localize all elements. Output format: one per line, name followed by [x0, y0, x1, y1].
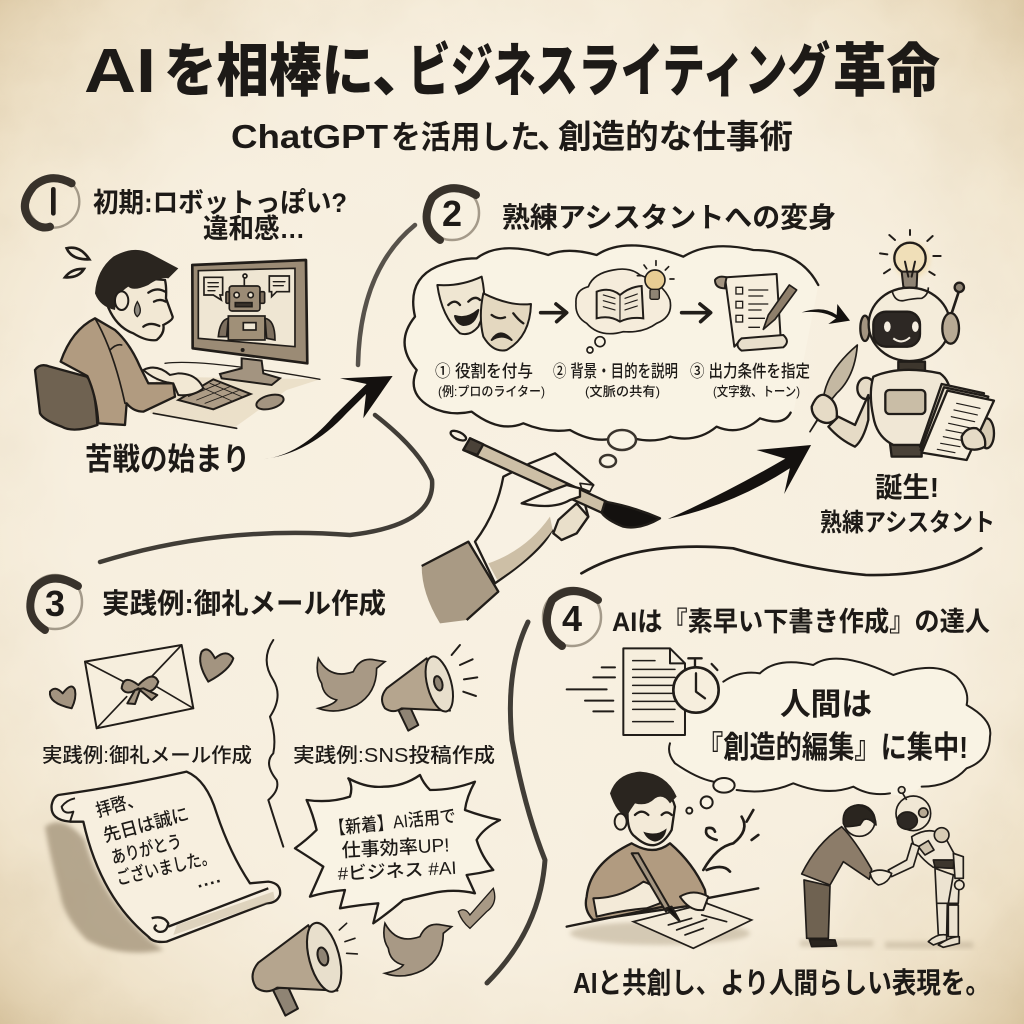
cloud tail bubbles: [600, 430, 636, 467]
title: 、: [372, 39, 430, 104]
illustrations: arrow, hand and wave: [422, 429, 981, 623]
burst bubble text: #ビジネス #AI: [337, 858, 457, 884]
icon: envelope with bow: [85, 645, 193, 728]
scroll letter text: 先日は誠に: [101, 804, 191, 846]
cloud text line 1: 人間は: [780, 687, 872, 722]
happy man: hands and brush: [593, 853, 708, 922]
arrow: to robot: [802, 304, 850, 324]
icon: megaphone: [382, 645, 477, 731]
icon: bird: [317, 658, 385, 711]
subtitle: を活用した: [391, 119, 540, 155]
step labels: (例:プロのライター): [438, 384, 545, 399]
numeral 3: 3: [45, 583, 65, 624]
hand with ink brush: [422, 429, 660, 623]
step badge 1: [25, 176, 79, 228]
title: を相棒に: [164, 39, 374, 104]
ground wash: [800, 940, 973, 948]
heading 1: 初期:ロボットっぽい?: [93, 188, 347, 218]
happy man: head: [627, 790, 675, 845]
robot partner: [888, 787, 964, 947]
numeral 4: 4: [562, 598, 582, 639]
panel 2: becoming a skilled assistant: [405, 186, 995, 623]
happy man: shirt: [586, 843, 707, 920]
step badge 4: [543, 588, 601, 646]
subtitle: 創造的な仕事術: [558, 118, 793, 155]
caption: birth: 誕生!: [875, 472, 939, 503]
step labels: ① 役割を付与: [435, 362, 533, 381]
divider: curve beside step 4: [487, 622, 545, 983]
title: 革命: [833, 39, 940, 104]
caption: thank-you mail: 実践例:御礼メール作成: [42, 744, 252, 767]
robot: papers: [920, 384, 984, 452]
robot: quill: [810, 345, 857, 432]
step badge 3: [28, 575, 82, 630]
icon: torn heart: [458, 888, 495, 928]
icon: sweat drops: [65, 248, 89, 277]
step labels: ③ 出力条件を指定: [690, 362, 810, 381]
burst bubble text: [328, 806, 457, 884]
thought cloud: [669, 659, 990, 796]
panel 3: practical examples: [28, 575, 500, 1016]
step labels: (文字数、トーン): [713, 384, 800, 399]
icon: bird bottom: [384, 923, 452, 976]
step labels: [435, 362, 810, 399]
scroll letter text: 拝啓、: [94, 789, 144, 821]
scroll letter: [52, 772, 280, 942]
wavy divider: [267, 640, 283, 847]
arrow: to step 2: [263, 376, 393, 459]
illustration: worried man at computer: [35, 248, 320, 430]
caption: skilled assistant: 熟練アシスタント: [820, 509, 995, 537]
panel 1: early struggle: [25, 176, 393, 477]
scroll letter text: ございました。: [114, 846, 217, 889]
icon: document: [623, 648, 685, 735]
arrow: brush stroke to robot: [668, 445, 811, 519]
burst bubble text: 【新着】AI活用で: [328, 806, 457, 839]
cloud text line 2: 『創造的編集』に集中!: [697, 730, 968, 765]
scroll letter text: ....: [194, 866, 222, 892]
desk wash: [570, 922, 750, 945]
panel 4: AI draft, human editing: [543, 588, 990, 1000]
monitor: [192, 260, 307, 363]
icon: megaphone bottom: [253, 919, 348, 1016]
caption: SNS post: 実践例:SNS投稿作成: [293, 744, 495, 767]
happy man: hair: [610, 772, 677, 817]
handshake: [870, 870, 892, 885]
subtitle: [231, 118, 793, 155]
heading 1 second line: 違和感…: [203, 214, 305, 244]
step labels: (文脈の共有): [585, 384, 660, 399]
caption: 苦戦の始まり: 苦戦の始まり: [85, 442, 250, 477]
illustrations of panel 4: [567, 648, 990, 948]
thought bubbles: [686, 778, 735, 814]
icon: checklist scroll and pen: [715, 274, 797, 351]
arrow: masks to book: [541, 304, 567, 322]
ink swirls: [703, 810, 758, 872]
icon: stopwatch: [673, 658, 719, 713]
man: hands: [143, 368, 203, 395]
icon: light bulb: [637, 261, 674, 299]
scroll letter text: ありがとう: [109, 830, 184, 868]
man: body: [61, 318, 175, 425]
step labels: ② 背景・目的を説明: [553, 362, 678, 381]
icon: comedy and tragedy masks: [437, 277, 531, 351]
thought cloud with three steps: [405, 245, 818, 440]
divider: wavy brush line: [582, 547, 981, 575]
title: AI: [84, 37, 156, 106]
icon: book in small thought cloud: [576, 269, 671, 353]
illustrations of panel 3: [45, 640, 500, 1016]
megaphone rays: [339, 923, 357, 954]
man: hair: [95, 250, 178, 310]
divider: brush swirl between steps: [100, 225, 432, 562]
handshake scene: [800, 787, 973, 948]
chair: [35, 365, 97, 430]
title: ビジネスライティング: [408, 39, 830, 104]
screen robot: [204, 274, 289, 340]
bowing businessman: [802, 805, 876, 947]
speed lines: [567, 667, 615, 711]
scroll letter shadow: [45, 822, 163, 953]
arrow: book to scroll: [682, 304, 711, 322]
icon: hearts: [50, 649, 233, 708]
subtitle: ChatGPT: [231, 118, 388, 155]
burst bubble text: 仕事効率UP!: [341, 834, 450, 862]
icon: bulb over robot: [880, 230, 941, 289]
numeral 2: 2: [442, 193, 462, 234]
heading 4: AIは『素早い下書き作成』の達人: [612, 607, 990, 637]
heading 2: 熟練アシスタントへの変身: [502, 202, 836, 233]
subtitle: 、: [537, 119, 569, 155]
robot assistant with bulb, quill and papers: [802, 230, 994, 460]
heading 3: 実践例:御礼メール作成: [102, 588, 386, 619]
step badge 2: [425, 186, 479, 240]
burst speech bubble: [295, 775, 500, 923]
keyboard: [178, 379, 251, 409]
scroll letter text: [94, 789, 222, 892]
desk and paper: [567, 888, 758, 927]
title: [84, 37, 940, 106]
robot parts: [810, 283, 994, 460]
man: face: [107, 277, 173, 340]
